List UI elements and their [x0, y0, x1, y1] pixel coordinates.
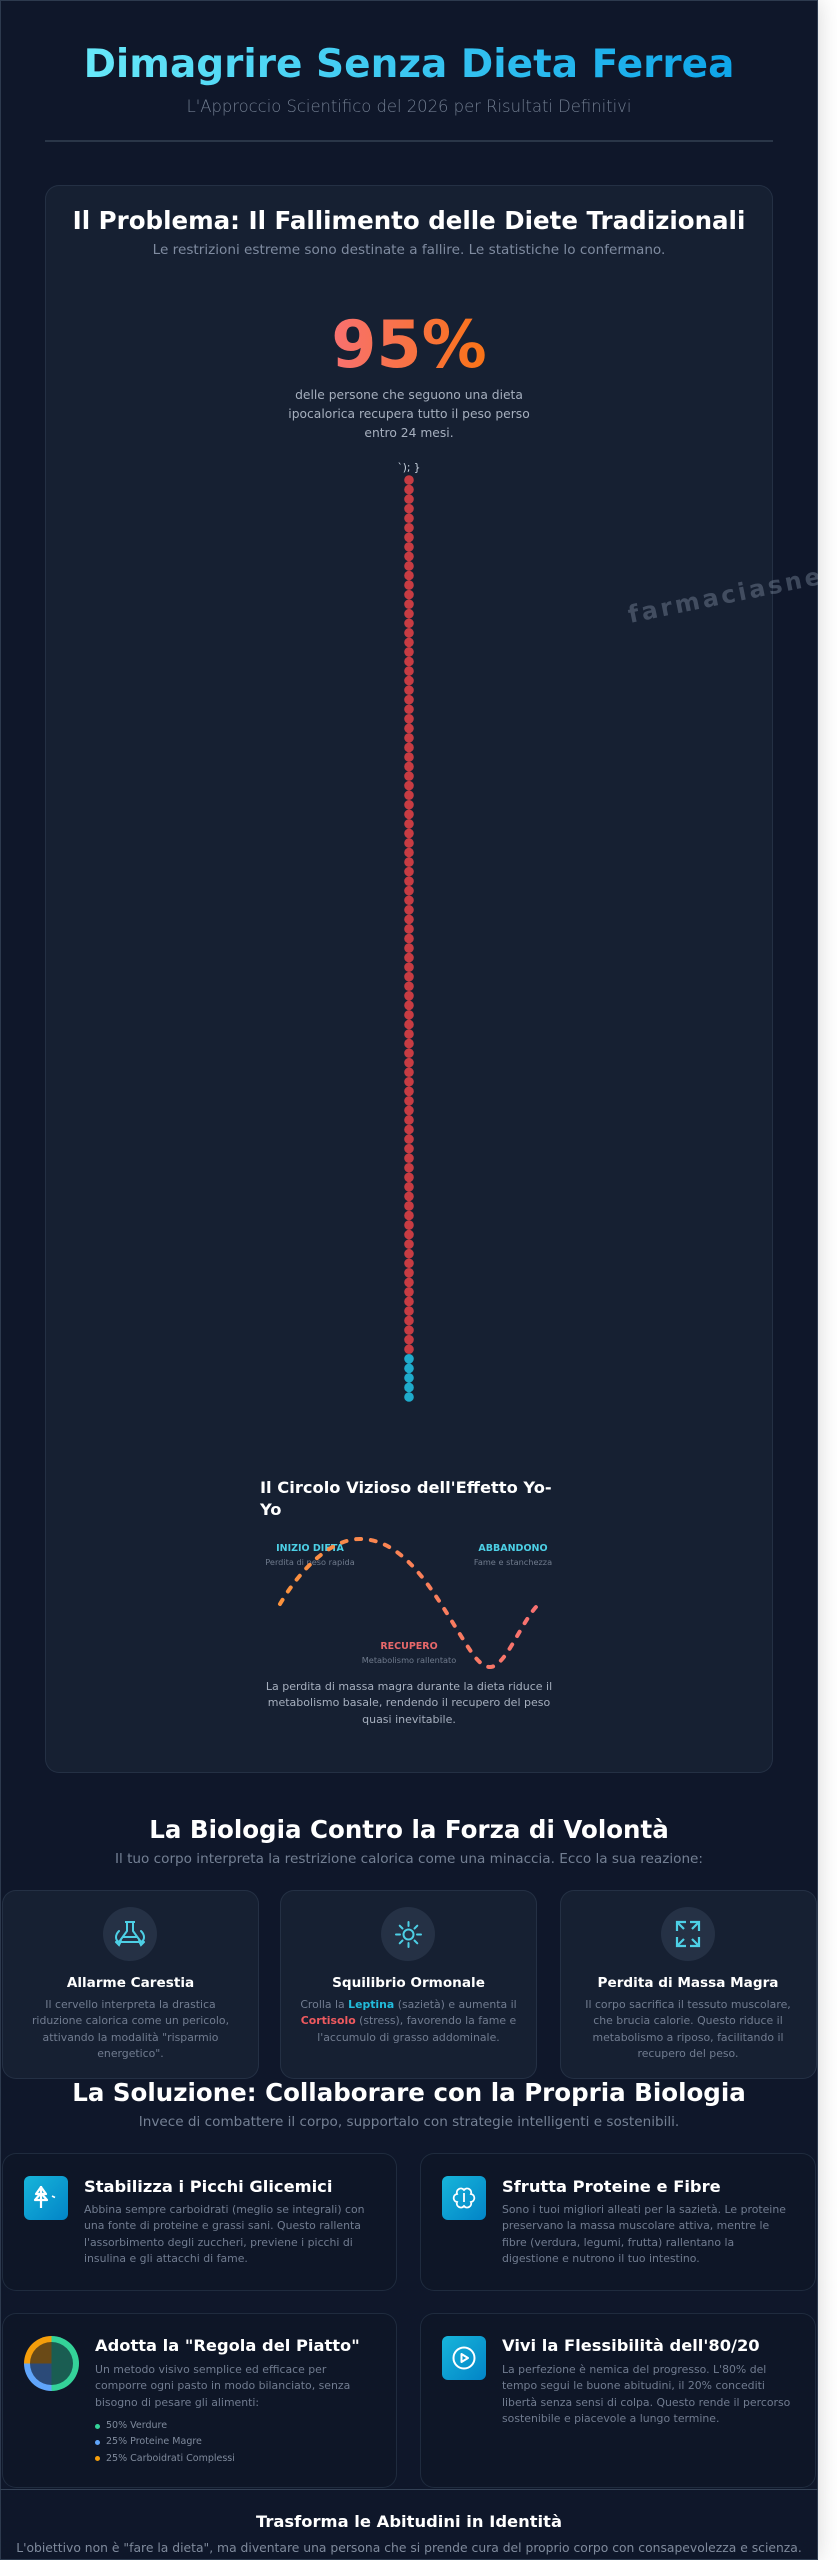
- label: recupero: Metabolismo rallentato: [362, 1655, 456, 1665]
- card text: Un metodo visivo semplice ed efficace per: [95, 2363, 326, 2376]
- card title: Perdita di Massa Magra: [598, 1975, 778, 1991]
- label: recupero: RECUPERO: [380, 1641, 438, 1652]
- section heading: La Soluzione: Collaborare con la Propria Biologia: [72, 2078, 746, 2107]
- legend: proteine: 25% Proteine Magre: [106, 2436, 202, 2447]
- label: inizio dieta: INIZIO DIETA: [276, 1543, 344, 1554]
- statistic description: entro 24 mesi.: [364, 426, 454, 440]
- icon: tree: [24, 2176, 68, 2220]
- panel: il problema: [45, 185, 773, 1773]
- section subheading: Invece di combattere il corpo, supportalo con strategie intelligenti e sostenibili.: [139, 2114, 679, 2130]
- label: abbandono: ABBANDONO: [478, 1543, 548, 1554]
- card text: [300, 1998, 517, 2044]
- section: soluzione: [2, 2078, 816, 2488]
- card text: energetico".: [97, 2047, 164, 2060]
- label: inizio dieta: [265, 1543, 355, 1567]
- card text: [95, 2363, 350, 2409]
- statistic description: ipocalorica recupera tutto il peso perso: [288, 407, 530, 421]
- footer title: Trasforma le Abitudini in Identità: [256, 2512, 562, 2531]
- legend: verdure: 50% Verdure: [106, 2420, 167, 2431]
- header: [45, 42, 773, 142]
- card text: Abbina sempre carboidrati (meglio se integrali) con: [84, 2203, 365, 2216]
- red dots: [404, 480, 414, 1350]
- icon: expand arrows: [661, 1907, 715, 1961]
- card text: [502, 2203, 786, 2265]
- card: perdita di massa magra: [560, 1890, 816, 2079]
- label: abbandono: [474, 1543, 552, 1567]
- card: squilibrio ormonale: [280, 1890, 537, 2079]
- icon: plate donut: [24, 2336, 79, 2391]
- dot column chart: [404, 475, 414, 1402]
- card: picchi glicemici: [2, 2153, 397, 2291]
- card text: [84, 2203, 365, 2265]
- card text: metabolismo a riposo, facilitando il: [592, 2031, 784, 2044]
- yo-yo description: quasi inevitabile.: [362, 1713, 456, 1726]
- card text: insulina e gli attacchi di fame.: [84, 2252, 248, 2265]
- yo-yo description: La perdita di massa magra durante la dieta riduce il: [266, 1680, 552, 1693]
- subtitle: L'Approccio Scientifico del 2026 per Risultati Definitivi: [187, 97, 631, 116]
- label: recupero: [362, 1641, 456, 1665]
- card text: attivando la modalità "risparmio: [43, 2031, 218, 2044]
- footer: [0, 2489, 818, 2560]
- card text: Sono i tuoi migliori alleati per la sazietà. Le proteine: [502, 2203, 786, 2216]
- panel heading: Il Problema: Il Fallimento delle Diete Tradizionali: [73, 206, 745, 235]
- card text: Cortisolo (stress), favorendo la fame e: [301, 2014, 516, 2027]
- card text: preservano la massa muscolare attiva, mentre le: [502, 2219, 769, 2232]
- card title: Squilibrio Ormonale: [332, 1975, 485, 1991]
- card text: una fonte di proteine e grassi sani. Questo rallenta: [84, 2219, 361, 2232]
- statistic: 95%: 95%: [331, 308, 487, 383]
- card: flessibilita: [420, 2313, 816, 2488]
- card text: sostenibile e piacevole a lungo termine.: [502, 2412, 719, 2425]
- statistic description: delle persone che seguono una dieta: [295, 388, 523, 402]
- teal dots: [404, 1359, 414, 1398]
- yo-yo curve: [278, 1537, 538, 1669]
- card text: [585, 1998, 791, 2060]
- yo-yo description: metabolismo basale, rendendo il recupero del peso: [268, 1696, 550, 1709]
- card text: l'accumulo di grasso addominale.: [317, 2031, 500, 2044]
- card title: Vivi la Flessibilità dell'80/20: [502, 2336, 760, 2355]
- yo-yo heading: Il Circolo Vizioso dell'Effetto Yo-: [260, 1478, 552, 1497]
- card title: Sfrutta Proteine e Fibre: [502, 2177, 721, 2196]
- card text: [502, 2363, 790, 2425]
- yo-yo heading: Yo: [260, 1500, 281, 1519]
- card: proteine e fibre: [420, 2153, 816, 2291]
- label: inizio dieta: Perdita di peso rapida: [265, 1557, 355, 1567]
- footer text: L'obiettivo non è "fare la dieta", ma diventare una persona che si prende cura del proprio corpo con consapevolezza e scienza.: [16, 2541, 802, 2555]
- yo-yo chart: [265, 1537, 552, 1669]
- stray code text: `); }: [398, 462, 420, 474]
- panel subheading: Le restrizioni estreme sono destinate a fallire. Le statistiche lo confermano.: [153, 242, 665, 258]
- label: abbandono: Fame e stanchezza: [474, 1557, 552, 1567]
- card text: fibre (verdura, legumi, frutta) rallentano la: [502, 2236, 734, 2249]
- card text: che brucia calorie. Questo riduce il: [593, 2014, 783, 2027]
- icon: play: [442, 2336, 486, 2380]
- legend: carboidrati: 25% Carboidrati Complessi: [106, 2453, 235, 2464]
- card text: riduzione calorica come un pericolo,: [32, 2014, 229, 2027]
- title: Dimagrire Senza Dieta Ferrea: [84, 42, 734, 87]
- card text: Il cervello interpreta la drastica: [45, 1998, 216, 2011]
- yo-yo description: [266, 1680, 552, 1726]
- card text: comporre ogni pasto in modo bilanciato, senza: [95, 2379, 350, 2392]
- card: allarme carestia: [2, 1890, 259, 2079]
- statistic description: [288, 388, 530, 440]
- card text: tempo segui le buone abitudini, il 20% concediti: [502, 2379, 765, 2392]
- card title: Stabilizza i Picchi Glicemici: [84, 2177, 332, 2196]
- card text: Il corpo sacrifica il tessuto muscolare,: [585, 1998, 791, 2011]
- card text: [32, 1998, 229, 2060]
- card text: Crolla la Leptina (sazietà) e aumenta il: [300, 1998, 517, 2011]
- section heading: La Biologia Contro la Forza di Volontà: [149, 1815, 669, 1844]
- card text: l'assorbimento degli zuccheri, previene i picchi di: [84, 2236, 353, 2249]
- section: biologia: [2, 1815, 817, 2079]
- yo-yo heading: [260, 1478, 552, 1519]
- card text: recupero del peso.: [638, 2047, 738, 2060]
- card title: Allarme Carestia: [67, 1975, 194, 1991]
- card text: La perfezione è nemica del progresso. L'80% del: [502, 2363, 766, 2376]
- section subheading: Il tuo corpo interpreta la restrizione calorica come una minaccia. Ecco la sua reazione:: [115, 1851, 703, 1867]
- icon: flask: [103, 1907, 157, 1961]
- card text: bisogno di pesare gli alimenti:: [95, 2396, 259, 2409]
- card title: Adotta la "Regola del Piatto": [95, 2336, 360, 2355]
- icon: flower: [442, 2176, 486, 2220]
- card text: libertà senza sensi di colpa. Questo rende il percorso: [502, 2396, 790, 2409]
- icon: sun: [381, 1907, 435, 1961]
- card: regola del piatto: [2, 2313, 397, 2488]
- card text: digestione e nutrono il tuo intestino.: [502, 2252, 700, 2265]
- plate legend: [95, 2420, 235, 2464]
